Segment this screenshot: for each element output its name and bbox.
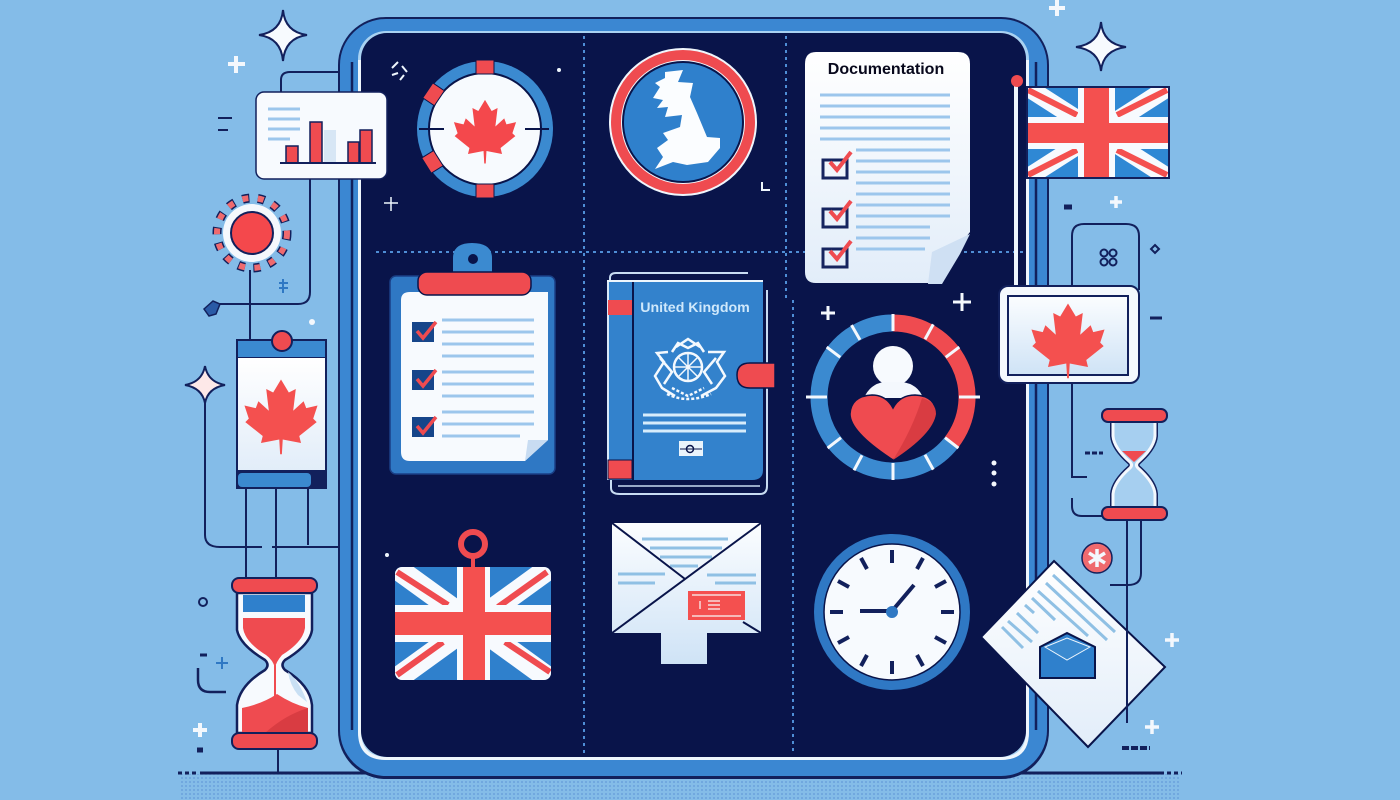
icon: small blue plus marks [216, 279, 288, 669]
passport title: United Kingdom [640, 300, 750, 316]
icon: person with heart [806, 314, 980, 480]
icon: UK map badge [609, 48, 757, 196]
crest [655, 339, 725, 399]
small dark details [197, 118, 1162, 750]
icon: Canada banner [236, 331, 327, 489]
icon: clipboard [390, 243, 555, 474]
icon: red seal [1082, 543, 1112, 573]
text lines: document [820, 95, 950, 249]
icon: letter tilted [981, 561, 1165, 747]
panel: tablet frame [338, 17, 1049, 779]
decorative circuit lines right [1072, 224, 1141, 723]
icon: envelope [612, 523, 761, 664]
icon: gear sun [217, 198, 287, 268]
panel: Documentation sheet [805, 52, 970, 284]
icon: decorative marks on dark panel [384, 62, 770, 556]
icon: large hourglass left [232, 578, 317, 749]
icon: bar chart card [256, 92, 387, 179]
ground strip [178, 773, 1182, 800]
checkboxes: document [823, 152, 851, 267]
icon: United Kingdom passport [607, 273, 775, 494]
heading: Documentation: Documentation [828, 61, 944, 78]
decorative circuit lines left [198, 72, 340, 772]
decorative sparkles [185, 10, 1126, 403]
icon: Canada badge [417, 60, 553, 198]
icon: UK flag [1026, 86, 1170, 179]
icon: Canada flag card [999, 286, 1139, 383]
icon: flagpole [1011, 75, 1023, 285]
icon: small blue diamond [204, 301, 220, 316]
decorative plus marks [193, 0, 1179, 737]
icon: UK flag tag [395, 532, 551, 680]
icon: clock [814, 534, 970, 690]
icon: small hourglass right [1102, 409, 1167, 520]
